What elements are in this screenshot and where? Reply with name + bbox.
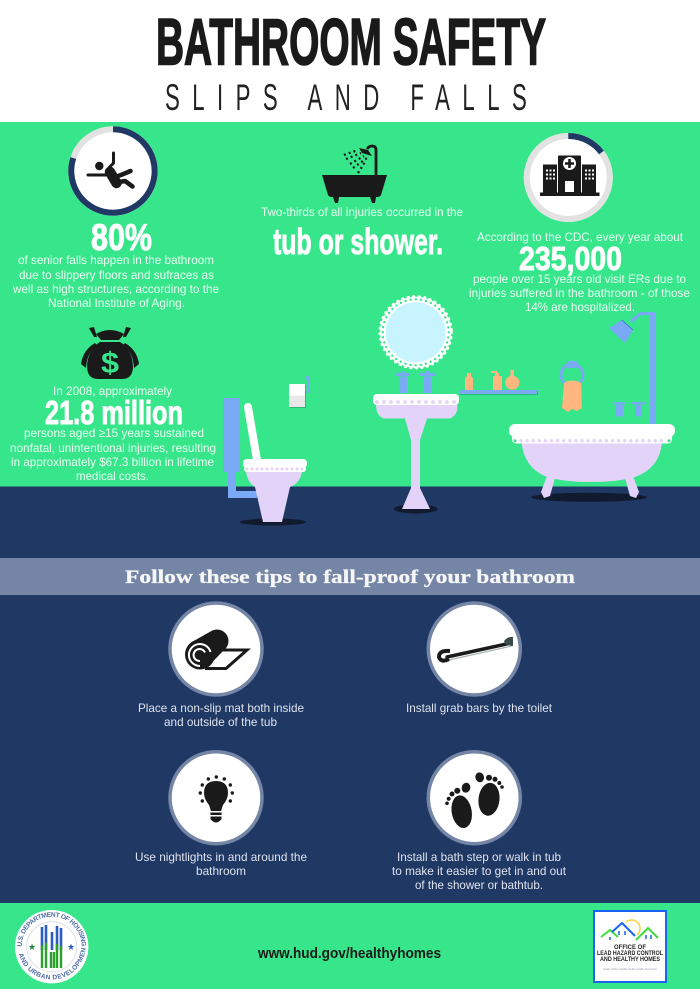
illustration: towel on ring: [561, 361, 583, 412]
text: senior falls description: [12, 253, 219, 310]
logo: Office of Lead Hazard Control: OFFICE OF: [614, 945, 646, 951]
text: ER visit description: [469, 272, 690, 314]
logo: HUD seal: ★: [67, 942, 75, 952]
illustration: mirror: [380, 297, 451, 368]
icon: falling person in progress ring: [68, 126, 158, 216]
text: mat tip: Place a non-slip mat both inside: [138, 701, 304, 715]
subtitle: SLIPS AND FALLS: [165, 77, 527, 118]
text: senior falls description: National Institute of Aging.: [48, 296, 185, 310]
text: bath step tip: [392, 850, 567, 892]
icon: rolled mat: [170, 603, 262, 695]
banner: tips heading: [0, 558, 700, 595]
illustration: toilet: [223, 398, 307, 526]
text: ER visit description: injuries suffered in the bathroom - of those: [469, 286, 690, 300]
stat: tub or shower: tub or shower.: [273, 221, 443, 262]
stat: 235,000: 235,000: [519, 240, 622, 277]
logo: HUD seal: AND URBAN DEVELOPMENT: [18, 948, 86, 980]
text: injury cost description: persons aged ≥15 years sustained: [24, 426, 204, 440]
logo: Office of Lead Hazard Control: AND HEALTHY HOMES: [600, 957, 660, 963]
text: 2008 intro: In 2008, approximately: [53, 384, 172, 398]
panel: 235,000 ER visits: [469, 133, 690, 314]
illustration: sink with faucets: [373, 371, 459, 514]
illustration: toilet paper: [289, 376, 310, 408]
text: grab bar tip: Install grab bars by the toilet: [406, 701, 553, 715]
logo: Office of Lead Hazard Control: Healthy Children | Healthy Families | Healthy Communities: [603, 967, 657, 971]
icon: money bag: $: [101, 347, 119, 380]
text: nightlight tip: [135, 850, 307, 878]
panel: nightlights tip: [135, 752, 307, 878]
logo: Office of Lead Hazard Control: [594, 911, 666, 982]
text: mat tip: and outside of the tub: [164, 715, 277, 729]
panel: 21.8 million injuries: [10, 327, 216, 483]
text: bath step tip: to make it easier to get in and out: [392, 864, 567, 878]
text: senior falls description: of senior falls happen in the bathroom: [18, 253, 214, 267]
title: [156, 4, 546, 118]
stat: 21.8 million: 21.8 million: [45, 394, 183, 431]
panel: non-slip mat tip: [138, 603, 304, 729]
text: nightlight tip: Use nightlights in and around the: [135, 850, 307, 864]
illustration: shelf with bottles: [459, 370, 538, 395]
text: bath step tip: of the shower or bathtub.: [415, 878, 543, 892]
panel: bath step tip: [392, 752, 567, 892]
icon: grab bar: [428, 603, 520, 695]
panel: grab bars tip: [406, 603, 553, 715]
text: nightlight tip: bathroom: [196, 864, 246, 878]
text: ER visit description: 14% are hospitalized.: [525, 300, 635, 314]
text: injury cost description: medical costs.: [76, 469, 149, 483]
text: senior falls description: due to slippery floors and sufraces as: [19, 268, 214, 282]
text: ER visit description: people over 15 years old visit ERs due to: [473, 272, 686, 286]
text: mat tip: [138, 701, 304, 729]
text: senior falls description: well as high structures, according to the: [12, 282, 219, 296]
icon: bathtub with shower: [322, 146, 387, 203]
logo: HUD seal: [15, 910, 88, 984]
text: bath step tip: Install a bath step or walk in tub: [397, 850, 561, 864]
banner: tips heading: Follow these tips to fall-proof your bathroom: [125, 567, 575, 588]
panel: 80 percent senior falls: [12, 126, 219, 310]
panel: tub or shower: [261, 146, 463, 262]
text: CDC intro: According to the CDC, every year about: [477, 230, 684, 244]
stat: 80%: 80%: [91, 217, 152, 258]
text: injury cost description: in approximately $67.3 billion in lifetime: [11, 455, 214, 469]
illustration: bathtub: [509, 424, 675, 502]
logo: Office of Lead Hazard Control: LEAD HAZARD CONTROL: [597, 951, 663, 957]
icon: hospital in progress ring: [524, 133, 613, 222]
text: two-thirds of injuries: Two-thirds of all injuries occurred in the: [261, 205, 463, 219]
logo: HUD seal: ★: [28, 942, 36, 952]
text: injury cost description: nonfatal, unintentional injuries, resulting: [10, 441, 216, 455]
icon: light bulb: [170, 752, 262, 844]
icon: footprints: [428, 752, 520, 844]
text: injury cost description: [10, 426, 216, 483]
logo: HUD seal: U.S. DEPARTMENT OF HOUSING: [17, 912, 86, 946]
footer url: www.hud.gov/healthyhomes: [257, 945, 441, 962]
illustration: shower: [609, 312, 655, 425]
icon: money bag: [81, 327, 139, 380]
